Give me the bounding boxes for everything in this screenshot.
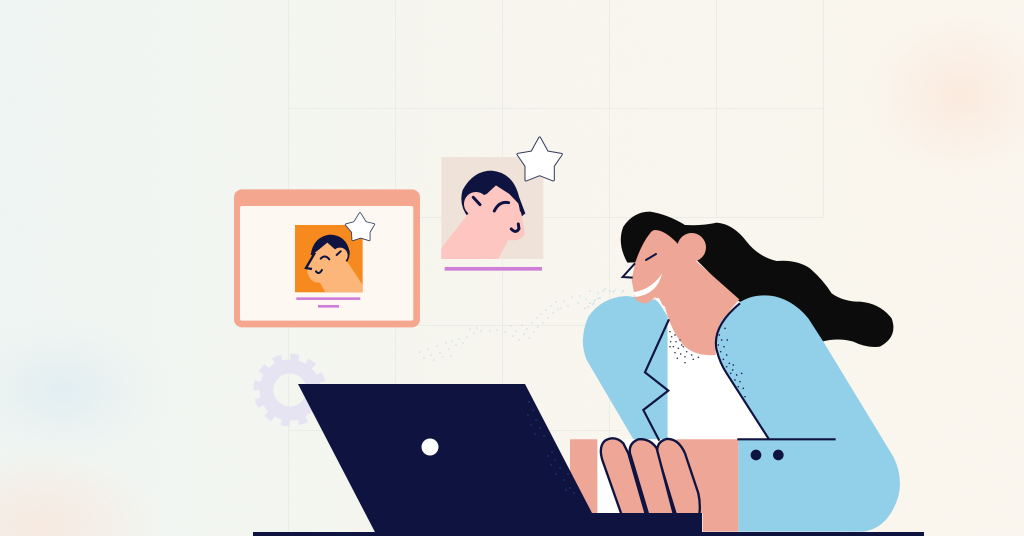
forearm skin <box>570 439 597 513</box>
laptop <box>253 384 924 536</box>
speckle trail <box>420 289 622 360</box>
closed eye <box>646 254 656 260</box>
neck and face <box>632 230 739 355</box>
icon: gear <box>257 357 323 423</box>
chin fold <box>653 297 663 307</box>
icon: pink portrait <box>441 171 525 259</box>
fingers <box>601 438 700 515</box>
jacket lapels and lines <box>643 303 836 441</box>
smile <box>633 274 662 297</box>
glasses/nose line <box>623 263 635 278</box>
icon: large star <box>518 138 561 180</box>
hair <box>621 212 893 347</box>
left arm <box>583 296 668 439</box>
background grid <box>288 0 824 536</box>
panel: browser window with profile card <box>234 189 420 327</box>
laptop camera dot <box>422 438 438 456</box>
jacket buttons <box>751 450 784 460</box>
icon: orange portrait <box>295 225 363 292</box>
caption bars <box>296 297 360 308</box>
white shirt <box>597 322 770 513</box>
icon: small star <box>346 213 374 240</box>
woman <box>570 212 900 532</box>
panel: floating profile card <box>441 138 561 271</box>
caption bar <box>445 267 542 271</box>
right arm <box>717 295 900 532</box>
laptop speckle <box>528 402 574 493</box>
speckle shading <box>585 291 745 397</box>
ear <box>677 233 706 262</box>
